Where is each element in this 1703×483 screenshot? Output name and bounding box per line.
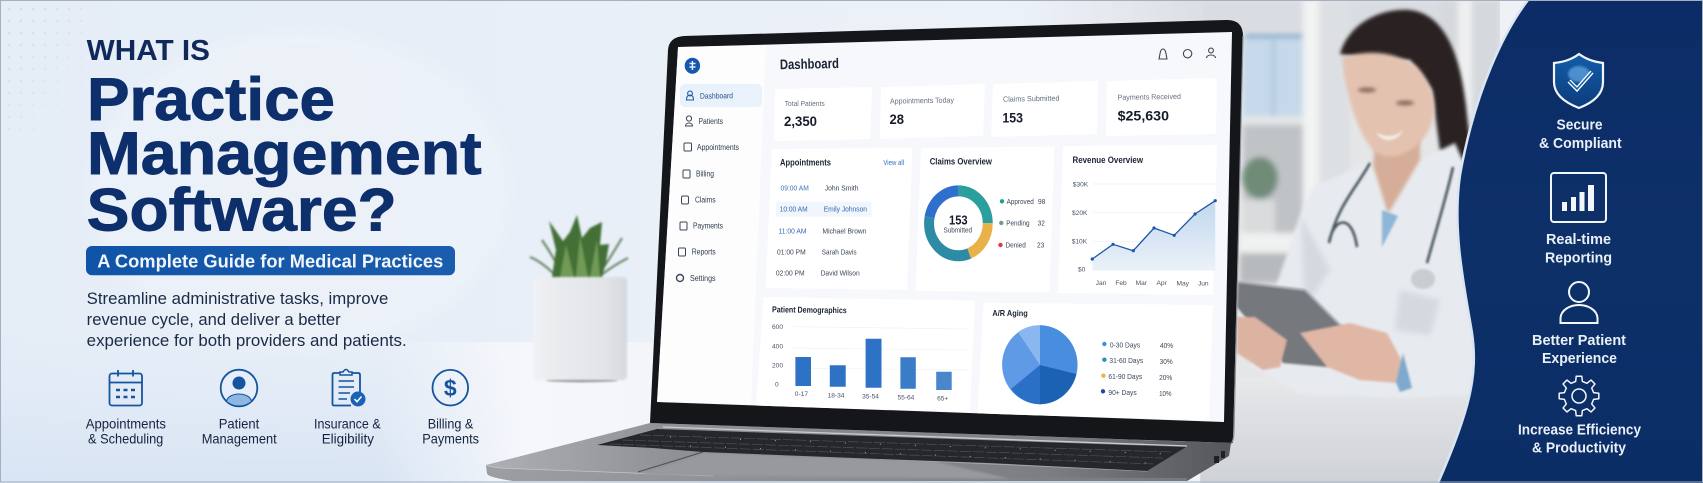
panel: appointments xyxy=(766,148,912,290)
panel: claims overview: Submitted xyxy=(944,226,972,235)
aging legend: 90+ Days xyxy=(1108,388,1137,397)
neck and face xyxy=(1373,135,1420,214)
heading: what is: WHAT IS xyxy=(87,35,210,67)
panel: revenue overview xyxy=(1058,145,1217,295)
panel: a/r aging xyxy=(978,303,1213,420)
benefit: secure and compliant xyxy=(1539,54,1622,152)
aging legend: 31-60 Days xyxy=(1109,356,1144,365)
line chart: $30K xyxy=(1073,181,1089,188)
line chart: Apr xyxy=(1156,280,1168,287)
benefit: better patient experience xyxy=(1532,282,1626,367)
claims legend: Denied xyxy=(1006,241,1026,250)
feature: billing and payments xyxy=(422,370,479,446)
line chart: Jan xyxy=(1096,280,1107,287)
trackpad xyxy=(640,453,1010,479)
icon: clipboard check xyxy=(332,370,366,406)
laptop base xyxy=(486,423,1231,481)
panel: appointments: David Wilson xyxy=(821,268,860,277)
nav: appointments: Appointments xyxy=(697,143,739,152)
line chart: $10K xyxy=(1072,238,1088,245)
laptop xyxy=(486,20,1243,481)
stethoscope xyxy=(1329,163,1453,263)
nav: billing xyxy=(683,170,714,179)
aging legend: 10% xyxy=(1159,389,1172,398)
scrubs xyxy=(1382,210,1398,247)
dashboard xyxy=(657,45,1217,420)
stat card: total patients xyxy=(774,87,872,141)
nav: dashboard xyxy=(686,91,733,101)
icon: shield xyxy=(1554,54,1603,108)
benefit: real-time reporting: Reporting xyxy=(1545,250,1612,267)
nav: patients: Patients xyxy=(698,117,723,126)
table right xyxy=(1200,424,1460,483)
dashboard heading: Dashboard xyxy=(780,55,839,72)
icon: dollar: $ xyxy=(444,375,457,401)
stat card: claims submitted: 153 xyxy=(1002,110,1023,126)
background xyxy=(0,1,1200,483)
panel: appointments: Michael Brown xyxy=(822,226,866,235)
aging legend: 30% xyxy=(1160,357,1173,366)
icon: patient xyxy=(221,370,257,406)
aging legend: 20% xyxy=(1159,373,1173,382)
stat card: total patients: 2,350 xyxy=(784,113,817,129)
table surface xyxy=(380,342,700,483)
nav: payments xyxy=(680,222,723,231)
description text xyxy=(87,290,407,350)
benefit: better patient experience: Better Patient xyxy=(1532,332,1626,349)
description text: experience for both providers and patients. xyxy=(87,332,407,350)
icon: gear xyxy=(1559,376,1599,416)
panel: revenue overview: Revenue Overview xyxy=(1072,155,1144,165)
aging legend: 40% xyxy=(1160,341,1174,350)
benefit: increase efficiency and productivity xyxy=(1518,376,1642,457)
ports xyxy=(1214,456,1219,463)
panel: claims overview xyxy=(916,146,1054,292)
benefit: real-time reporting xyxy=(1545,173,1612,267)
feature: appointments and scheduling xyxy=(86,370,166,446)
icon: bar chart xyxy=(1551,173,1606,222)
nav: payments: Payments xyxy=(693,222,723,231)
benefit: better patient experience: Experience xyxy=(1542,350,1617,367)
stat card: payments received: $25,630 xyxy=(1118,108,1169,124)
feature: insurance and eligibility: Eligibility xyxy=(322,430,374,446)
stat card: total patients: Total Patients xyxy=(785,99,825,108)
claims legend: 98 xyxy=(1038,197,1045,206)
nav: reports: Reports xyxy=(692,248,716,257)
stat card: appointments today xyxy=(880,84,985,139)
donut chart xyxy=(929,191,988,256)
doctor coat xyxy=(1276,141,1463,302)
keyboard xyxy=(597,429,1186,471)
panel: appointments: Emily Johnson xyxy=(824,205,867,214)
feature: appointments and scheduling: & Scheduling xyxy=(88,430,163,446)
feature: appointments and scheduling: Appointments xyxy=(86,415,166,431)
aging legend: 0-30 Days xyxy=(1110,340,1141,349)
panel: appointments: 09:00 AM xyxy=(780,184,809,193)
bar chart: 18-34 xyxy=(828,392,845,399)
bar chart: 400 xyxy=(772,343,783,350)
hands xyxy=(1237,317,1287,370)
feature: insurance and eligibility: Insurance & xyxy=(314,415,381,431)
stat card: claims submitted xyxy=(991,81,1098,137)
benefit: secure and compliant: Secure xyxy=(1556,116,1602,133)
nav: appointments xyxy=(684,143,739,152)
nav: patients xyxy=(686,116,723,126)
feature: insurance and eligibility xyxy=(314,370,381,446)
tablet xyxy=(1237,282,1343,367)
logo xyxy=(685,58,700,74)
line chart: Feb xyxy=(1115,280,1127,287)
claims legend: Pending xyxy=(1006,219,1030,228)
laptop screen xyxy=(657,32,1232,422)
bar chart: 35-54 xyxy=(862,393,879,400)
stat card: payments received xyxy=(1106,78,1217,136)
panel: patient demographics xyxy=(756,297,975,412)
panel: appointments: 10:00 AM xyxy=(780,205,808,214)
panel: a/r aging: A/R Aging xyxy=(992,308,1028,318)
line chart xyxy=(1072,181,1217,288)
panel: appointments: 11:00 AM xyxy=(778,226,806,235)
stat card: claims submitted: Claims Submitted xyxy=(1003,94,1060,104)
navy benefits panel xyxy=(1438,0,1703,483)
panel: appointments: Sarah Davis xyxy=(822,247,857,256)
icon: calendar xyxy=(110,370,142,406)
aging legend xyxy=(1101,340,1174,398)
bar chart: 0 xyxy=(775,382,779,389)
panel: appointments: View all xyxy=(883,160,904,167)
bar chart: 55-64 xyxy=(897,394,915,401)
nav: settings: Settings xyxy=(690,274,716,283)
doctor xyxy=(1237,10,1480,398)
description text: revenue cycle, and deliver a better xyxy=(87,311,341,329)
potted plant xyxy=(530,215,628,382)
panel: patient demographics: Patient Demographics xyxy=(772,304,847,315)
bar chart xyxy=(772,324,968,402)
benefit: secure and compliant: & Compliant xyxy=(1539,135,1622,152)
bar chart: 65+ xyxy=(937,395,948,402)
sidebar xyxy=(657,45,766,404)
claims legend: Approved xyxy=(1007,197,1034,206)
nav: claims xyxy=(682,196,716,205)
claims legend: 32 xyxy=(1038,219,1045,228)
claims legend: 23 xyxy=(1037,241,1044,250)
feature: billing and payments: Billing & xyxy=(428,415,474,431)
feature: patient management: Management xyxy=(202,430,277,446)
nav: claims: Claims xyxy=(695,196,716,205)
subtitle pill xyxy=(86,246,455,275)
nav: dashboard: Dashboard xyxy=(700,91,733,101)
panel: appointments: 01:00 PM xyxy=(777,247,806,256)
line chart: Jun xyxy=(1198,280,1209,288)
line chart: $0 xyxy=(1078,267,1086,274)
panel: claims overview: 153 xyxy=(949,212,968,227)
benefit: real-time reporting: Real-time xyxy=(1546,231,1611,248)
benefit: increase efficiency and productivity: & Productivity xyxy=(1532,440,1627,457)
subtitle pill: A Complete Guide for Medical Practices xyxy=(97,251,443,271)
header icons xyxy=(1159,48,1216,59)
active nav item xyxy=(680,84,762,107)
benefit: increase efficiency and productivity: Increase Efficiency xyxy=(1518,422,1642,439)
feature: patient management xyxy=(202,370,277,446)
line chart: $20K xyxy=(1072,210,1088,217)
title: practice management software xyxy=(87,66,482,244)
bar chart: 0-17 xyxy=(795,391,808,398)
panel: appointments: Appointments xyxy=(780,158,831,168)
bar chart: 200 xyxy=(772,362,783,369)
stat card: appointments today: Appointments Today xyxy=(890,96,954,106)
title: practice management software: Practice xyxy=(87,66,335,133)
panel: claims overview: Claims Overview xyxy=(930,157,993,167)
feature: patient management: Patient xyxy=(219,415,259,431)
photo: blurred clinic background and doctor xyxy=(1200,0,1500,483)
icon: person xyxy=(1560,282,1598,323)
heading block xyxy=(87,35,482,244)
feature: billing and payments: Payments xyxy=(422,430,479,446)
aging legend: 61-90 Days xyxy=(1108,372,1143,381)
title: practice management software: Software? xyxy=(87,177,397,244)
laptop bezel xyxy=(650,20,1243,443)
nav: billing: Billing xyxy=(696,170,714,179)
line chart: Mar xyxy=(1136,280,1148,287)
nav: settings xyxy=(676,274,716,283)
stat card: appointments today: 28 xyxy=(890,111,904,127)
bar chart: 600 xyxy=(772,324,783,331)
claims legend xyxy=(998,197,1045,250)
panel: appointments: 02:00 PM xyxy=(776,268,805,277)
line chart: May xyxy=(1176,280,1190,287)
doctor hair xyxy=(1340,10,1478,170)
blurred office shelves xyxy=(1200,0,1500,300)
nav: reports xyxy=(678,248,716,257)
description text: Streamline administrative tasks, improve xyxy=(87,290,388,308)
title: practice management software: Management xyxy=(87,120,482,187)
stat card: payments received: Payments Received xyxy=(1117,92,1181,102)
panel: appointments: John Smith xyxy=(825,184,858,193)
pie chart xyxy=(1002,325,1078,404)
